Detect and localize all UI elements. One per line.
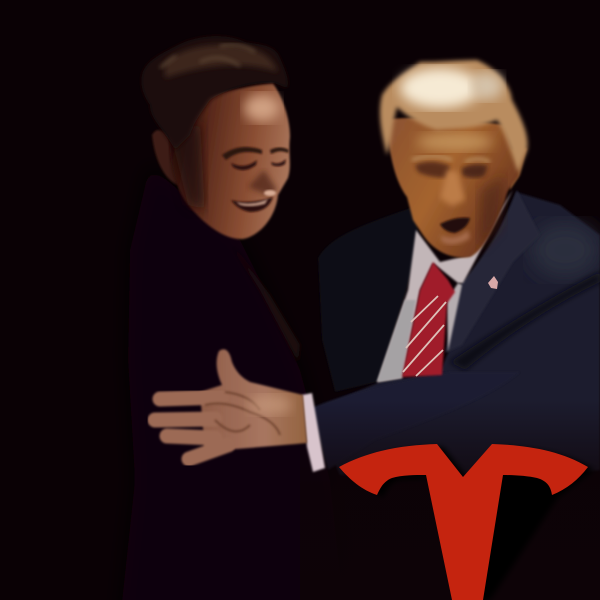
hair [380, 60, 528, 172]
fingers [155, 397, 228, 459]
nose highlight [264, 190, 276, 196]
dark fold across chest [450, 272, 600, 370]
lower fade [300, 400, 600, 600]
left front panel [318, 207, 420, 392]
ear [508, 148, 527, 190]
hair [141, 36, 288, 150]
lapel [445, 190, 540, 353]
forehead highlight [244, 94, 280, 122]
man on left: head [141, 36, 290, 239]
nose shadow [248, 170, 277, 195]
man on right: head [380, 60, 528, 258]
back of hand highlight [248, 395, 292, 415]
sleeve [311, 372, 520, 470]
lapel pin [488, 276, 498, 289]
hand [155, 349, 307, 459]
man on left: coat [120, 165, 345, 600]
red T logo [339, 444, 588, 600]
cheek shadow [172, 120, 205, 210]
brows and eyes [415, 162, 450, 178]
knuckles and veins [205, 392, 280, 435]
ear [152, 130, 178, 185]
forehead highlight [417, 133, 493, 151]
red striped tie [402, 262, 455, 377]
face [386, 118, 518, 258]
nose [440, 170, 465, 206]
mouth [440, 218, 470, 233]
shirt cuff [302, 393, 325, 472]
logo shadow [346, 447, 594, 600]
shoulder and body [312, 192, 600, 480]
mouth and smile [231, 197, 273, 212]
cheek shadow [478, 175, 505, 250]
thumb and palm [200, 349, 307, 452]
brows and eyes [222, 147, 262, 160]
face [170, 83, 290, 239]
man on right: suit jacket [300, 190, 600, 600]
man on right: shirt [377, 190, 513, 382]
shoulder highlight [530, 222, 600, 278]
